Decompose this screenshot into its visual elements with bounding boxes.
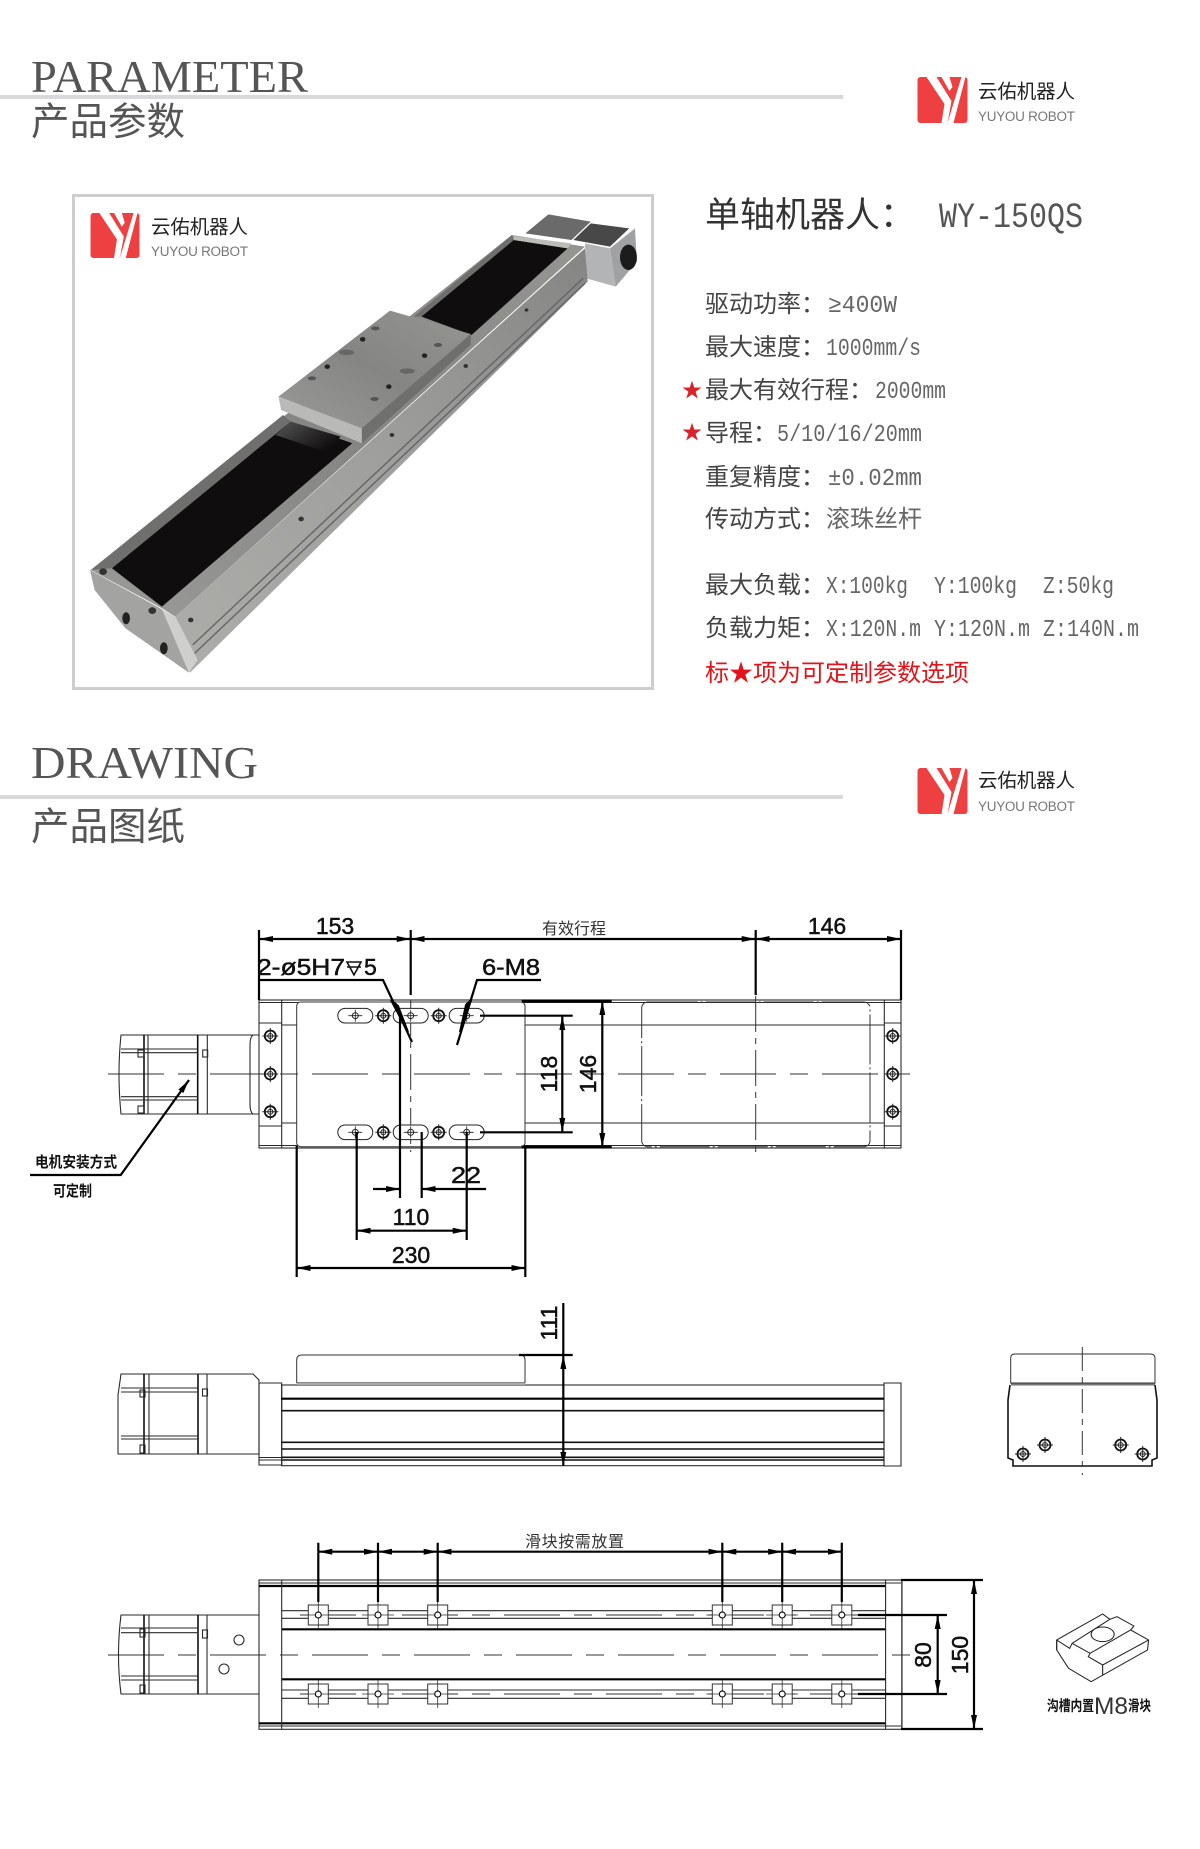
body [1008,1385,1157,1466]
icon: T-nut: 滑块 [1128,1698,1151,1715]
star 2: ★ [682,422,702,444]
logo: in photo: YUYOU ROBOT [151,244,248,259]
dimension: 146 length: 146 [808,913,846,939]
dimension: effective stroke: 有效行程 [542,920,606,938]
leader: 2-ø5H7: 5 [364,954,377,980]
star 1: ★ [682,380,702,402]
center line [108,1654,912,1656]
leader: 6-M8 [457,954,541,1045]
callout: motor mounting: 可定制 [53,1182,92,1200]
subtitle: product drawing: 产品图纸 [31,806,185,849]
icon: T-nut [1047,1614,1151,1720]
logo: in photo [91,213,248,259]
body top [91,235,585,617]
dimension: 150 [901,1580,983,1729]
spec list: X:120N.m [826,617,921,644]
body outline [259,1000,901,1148]
carriage [297,1355,525,1385]
title: DRAWING: DRAWING [31,738,258,788]
dimension: 153 [259,913,901,1000]
dimension: 230 [297,1146,525,1277]
dimension: 80: 80 [910,1642,936,1668]
carriage [278,311,471,443]
dimension: 118 [480,1016,573,1132]
dimension: 22: 22 [451,1162,481,1188]
dimension: slider placement: 滑块按需放置 [525,1533,624,1551]
title: PARAMETER: PARAMETER [31,52,308,102]
leader: 6-M8: 6-M8 [482,954,540,980]
dimension: 110: 110 [393,1204,429,1230]
dimension: 146 width: 146 [575,1055,601,1093]
spec list: Y:120N.m [934,617,1030,644]
dimension: 153: 153 [316,913,354,939]
drawing: end view [1008,1347,1157,1475]
spec list [682,196,1139,687]
black cover strips [112,422,352,607]
subtitle: product parameters: 产品参数 [31,101,185,144]
logo: top right: YUYOU ROBOT [978,109,1075,124]
logo: in photo: 云佑机器人 [151,216,248,238]
body side [175,248,588,673]
carriage holes [338,1008,484,1140]
drawing: side view [118,1303,901,1466]
dimension: slider placement [318,1533,842,1602]
dimension: 118: 118 [536,1056,562,1092]
motor [525,214,637,287]
spec list: ≥400W [828,293,898,320]
spec list: 2000mm [875,379,946,406]
spec: power: 驱动功率： [705,291,825,318]
header: parameter [0,52,843,144]
dimension: 22 [373,1016,486,1198]
spec: repeatability: 重复精度： [705,464,825,491]
model: WY-150QS [939,198,1083,238]
center lines [108,1073,911,1075]
body [259,1580,902,1729]
center line [1081,1347,1083,1475]
panel: product photo [74,196,652,688]
header: drawing [0,738,843,849]
T-nuts [302,1601,858,1708]
spec list: 5/10/16/20mm [777,422,922,449]
spec list: Y:100kg [934,574,1017,601]
motor [118,1374,259,1454]
callout: motor mounting: 电机安装方式 [35,1153,117,1171]
photo: linear module [90,214,637,673]
logo: top right: 云佑机器人 [978,81,1075,103]
icon: T-nut: M8 [1094,1693,1128,1720]
callout: motor mounting [30,1080,189,1200]
motor [118,1615,259,1694]
dimension: 80 [858,1615,947,1694]
end cap screws [262,1028,901,1120]
drawing: top view [30,913,911,1277]
spec list: 1000mm/s [826,336,921,363]
spec list: Z:140N.m [1043,617,1139,644]
body [281,1385,884,1466]
spec title: 单轴机器人： [705,196,915,235]
dimension: 146 width [522,1001,612,1147]
leader: 2-ø5H7: 2-ø5H7 [257,954,345,980]
dimension: 230: 230 [392,1242,430,1268]
spec: lead: 导程： [705,420,777,447]
customisation note: 标★项为可定制参数选项 [705,660,969,687]
logo: drawing section: 云佑机器人 [978,770,1075,792]
spec list: X:100kg [826,574,908,601]
spec: transmission: 传动方式： [705,506,825,533]
logo: top right [918,77,1075,124]
spec: speed: 最大速度： [705,334,825,361]
spec list: Z:50kg [1043,574,1114,601]
spec: stroke: 最大有效行程： [705,377,873,404]
screws [1015,1437,1151,1462]
drawing: bottom view [108,1533,983,1729]
carriage [1011,1354,1155,1383]
motor [119,1035,259,1114]
spec list: 滚珠丝杆 [826,506,922,535]
dimension: 110 [357,1132,467,1240]
leader: 2-ø5H7 [257,954,412,1042]
spec list: ±0.02mm [828,466,922,493]
end caps [259,1383,901,1466]
end face [90,570,195,673]
T-nut caption: 沟槽内置 [1047,1697,1094,1715]
logo: drawing section: YUYOU ROBOT [978,799,1075,814]
spec: max load: 最大负载： [705,572,825,599]
spec: load moment: 负载力矩： [705,615,825,642]
dimension: 150: 150 [947,1636,973,1674]
dimension: 111: 111 [536,1306,562,1340]
logo: drawing section [918,768,1075,814]
